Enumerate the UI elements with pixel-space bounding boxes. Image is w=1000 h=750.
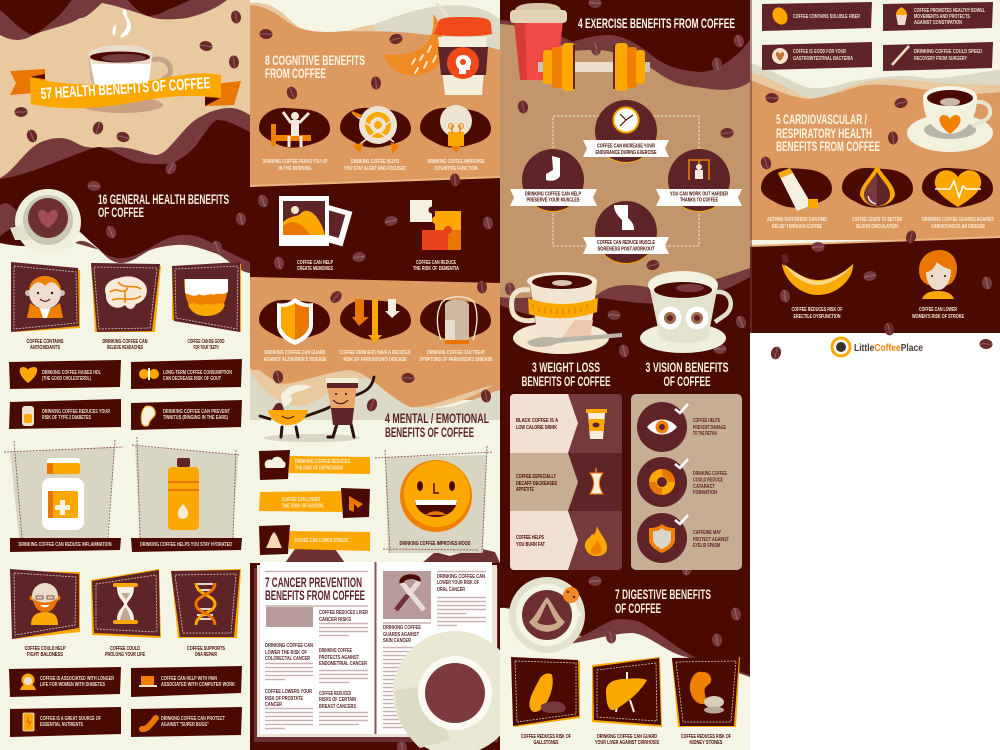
icon: down arrows [352, 299, 400, 343]
heading: 7 digestive benefits: OF COFFEE [615, 600, 661, 616]
panel: weight loss list: COFFEE HELPS [516, 535, 544, 541]
strip: HDL: (THE GOOD CHOLESTEROL) [42, 376, 91, 382]
strip: soluble fiber: COFFEE CONTAINS SOLUBLE FIBER [793, 14, 861, 20]
item: Alzheimer's [259, 298, 330, 363]
panel: prolong life [91, 569, 161, 658]
item: depression [259, 450, 370, 480]
panel: improves mood smiley: DRINKING COFFEE IMPROVES MOOD [400, 541, 470, 547]
icon: top-down cup on newspaper [393, 631, 517, 750]
panel: column 3 exercise background [500, 0, 750, 750]
strip: gut bacteria [762, 42, 872, 70]
icon: cup with eyes [640, 271, 731, 353]
strip: gout: LONG-TERM COFFEE CONSUMPTION [163, 370, 232, 376]
panel: exercise benefits diagram [510, 100, 742, 264]
icon: takeaway cup [586, 409, 607, 439]
item: stroke: COFFEE CAN LOWER [919, 307, 958, 313]
panel: kidney stones [672, 657, 740, 746]
item: stroke: WOMEN'S RISK OF STROKE [912, 314, 964, 320]
item: erectile dysfunction: ERECTILE DYSFUNCTION [794, 314, 840, 320]
panel: newspaper cancer prevention: PROTECTS AGAINST [319, 655, 359, 661]
item: reduced Parkinson's risk [340, 299, 411, 363]
strip: longer life for women: LIFE FOR WOMEN WITH DIABETES [40, 682, 105, 688]
item: circulation: COFFEE LEADS TO BETTER [852, 217, 903, 223]
heading: 8 cognitive benefits [265, 52, 365, 81]
icon: kidneys [139, 368, 159, 380]
item: depression: THE RISK OF DEPRESSION [295, 466, 343, 472]
panel: hydration [131, 437, 242, 552]
panel: column 2 cognitive background [250, 0, 500, 750]
icon: shield [277, 298, 313, 345]
item: stroke [912, 250, 964, 320]
icon: blood drop [860, 165, 895, 206]
icon: red takeaway cup [510, 3, 567, 80]
strip: nutrients: ESSENTIAL NUTRIENTS [40, 722, 83, 728]
strip: HDL: DRINKING COFFEE RAISES HDL [42, 370, 101, 376]
panel: newspaper cancer prevention: CANCER [265, 702, 283, 708]
heading: 16 general health benefits: OF COFFEE [98, 204, 144, 220]
panel: newspaper cancer prevention: ENDOMETRIAL CANCER [319, 661, 368, 667]
icon: brain [105, 276, 147, 309]
item: create memories: CREATE MEMORIES [297, 266, 333, 272]
heading: 3 vision benefits [646, 359, 728, 389]
strip: bowel movements [883, 2, 993, 31]
title ribbon [10, 69, 241, 108]
strip: surgery recovery: RECOVERY FROM SURGERY [914, 56, 967, 62]
strip: surgery recovery [883, 42, 993, 71]
item: cognitive function: DRINKING COFFEE IMPROVES [428, 159, 485, 165]
panel: prolong life: COFFEE COULD [110, 646, 140, 652]
heading: 7 digestive benefits: 7 DIGESTIVE BENEFITS [615, 586, 711, 602]
strip: gout: CAN DECREASE RISK OF GOUT [163, 376, 221, 382]
logo: LittleCoffeePlace [832, 338, 923, 356]
heading: 4 mental / emotional: 4 MENTAL / EMOTIONAL [385, 410, 489, 426]
icon: heart [20, 367, 37, 383]
item: depression: DRINKING COFFEE REDUCES [295, 459, 350, 465]
coffee beans: column 1 [14, 10, 247, 255]
item: treat Parkinson's symptoms: SYMPTOMS OF PARKINSON'S DISEASE [420, 357, 493, 363]
panel: newspaper cancer prevention: ORAL CANCER [437, 587, 466, 593]
strip: tinnitus: TINNITUS (RINGING IN THE EARS) [163, 415, 228, 421]
heading: 3 weight loss benefits: BENEFITS OF COFFEE [522, 373, 610, 389]
panel: liver [592, 657, 662, 746]
panel: newspaper cancer prevention: SKIN CANCER [383, 638, 412, 644]
strip: computer work: COFFEE CAN HELP WITH PAIN [161, 676, 217, 682]
icon: cup with measuring tape [512, 272, 622, 354]
panel: headaches [91, 263, 161, 351]
icon: liver [606, 672, 647, 712]
item: Alzheimer's: DRINKING COFFEE CAN GUARD [264, 350, 326, 356]
item: muscle soreness: SORENESS POST-WORKOUT [598, 246, 655, 252]
panel: newspaper cancer prevention: CANCER RISKS [319, 617, 351, 623]
item: dementia: COFFEE CAN REDUCE [416, 260, 456, 266]
icon: clock [614, 108, 638, 132]
panel: newspaper cancer prevention: RISK OF PROSTATE [265, 696, 303, 702]
icon: woman [20, 674, 36, 690]
item: muscle soreness [583, 201, 669, 264]
icon: dancing coffee cups [260, 377, 374, 442]
heading: 5 cardiovascular: RESPIRATORY HEALTH [776, 125, 872, 141]
item: retina: TO THE RETINA [693, 431, 717, 437]
heading: 8 cognitive benefits: 8 COGNITIVE BENEFITS [265, 52, 365, 68]
panel: newspaper cancer prevention: DRINKING COFFEE CAN [265, 643, 313, 649]
heading: 16 general health benefits: 16 GENERAL HEALTH BENEFITS [98, 191, 229, 207]
panel: baldness [10, 569, 80, 658]
item: cataract: CATARACT [693, 484, 715, 490]
panel: teeth: FOR YOUR TEETH [194, 345, 218, 351]
icon: ear [141, 406, 155, 426]
heading: 5 cardiovascular: BENEFITS FROM COFFEE [776, 138, 880, 154]
item: perks you up: IN THE MORNING [278, 166, 312, 172]
item: dementia [410, 200, 461, 272]
item: muscle soreness: COFFEE CAN REDUCE MUSCLE [597, 240, 655, 246]
heading: 8 cognitive benefits: FROM COFFEE [265, 65, 326, 81]
icon: glucose meter [22, 406, 34, 426]
item: cataract [637, 457, 727, 507]
panel: inflammation [4, 440, 123, 552]
item: perks you up: DRINKING COFFEE PERKS YOU UP [262, 159, 328, 165]
panel: headaches: DRINKING COFFEE CAN [102, 339, 148, 345]
panel: prolong life: PROLONG YOUR LIFE [105, 652, 145, 658]
panel: teeth: COFFEE CAN BE GOOD [188, 339, 224, 345]
item: retina [637, 402, 726, 452]
panel: newspaper cancer prevention: DRINKING COFFEE [383, 625, 421, 631]
panel: baldness: COFFEE COULD HELP [24, 646, 66, 652]
panel: weight loss list: APPETITE [516, 487, 534, 493]
icon: bacteria [142, 718, 156, 729]
panel: newspaper cancer prevention: DRINKING COFFEE CAN [437, 574, 485, 580]
panel: liver: YOUR LIVER AGAINST CIRRHOSIS [595, 740, 659, 746]
item: work out harder: YOU CAN WORK OUT HARDER [670, 192, 729, 198]
panel: antioxidants: ANTIOXIDANTS [30, 345, 60, 351]
icon: light bulb [440, 105, 472, 153]
panel: liver: DRINKING COFFEE CAN GUARD [597, 734, 657, 740]
strip: nutrients: COFFEE IS A GREAT SOURCE OF [40, 716, 101, 722]
strip: gout [131, 359, 242, 389]
icon: smiley face [400, 460, 472, 532]
panel: gallstones: COFFEE REDUCES RISK OF [521, 734, 571, 740]
strip: gut bacteria: GASTROINTESTINAL BACTERIA [793, 56, 854, 62]
panel: newspaper cancer prevention: BREAST CANCERS [319, 704, 356, 710]
icon: puzzle [410, 200, 461, 250]
item: suicide risk: THE RISK OF SUICIDE [282, 504, 324, 510]
heading: 5 cardiovascular [776, 111, 880, 154]
panel: newspaper cancer prevention: LOWER THE RISK OF [265, 650, 307, 656]
strip: longer life for women [9, 667, 121, 697]
item: stress: COFFEE CAN LOWER STRESS [294, 538, 348, 544]
item: reduced Parkinson's risk: COFFEE DRINKERS HAVE A REDUCED [340, 350, 410, 356]
item: cognitive function [420, 105, 491, 172]
panel: newspaper cancer prevention: COFFEE LOWERS YOUR [265, 689, 313, 695]
strip: bowel movements: AGAINST CONSTIPATION [914, 20, 962, 26]
item: erectile dysfunction: COFFEE REDUCES RISK OF [792, 307, 843, 313]
item: eyelid spasm [637, 513, 729, 563]
panel: column 4 background [750, 0, 1000, 333]
panel: headaches: RELIEVE HEADACHES [107, 345, 143, 351]
strip: bowel movements: MOVEMENTS AND PROTECTS [914, 14, 970, 20]
coffee beans: column 2 [256, 28, 494, 750]
panel: kidney stones: KIDNEY STONES [690, 740, 723, 746]
panel: antioxidants [11, 262, 80, 351]
panel: inflammation: DRINKING COFFEE CAN REDUCE INFLAMMATION [18, 542, 112, 548]
icon: bald man [30, 583, 60, 625]
icon: top-down cup with heart [10, 189, 81, 255]
item: cataract: FORMATION [693, 490, 717, 496]
strip: gut bacteria: COFFEE IS GOOD FOR YOUR [793, 49, 847, 55]
item: cataract: COULD REDUCE [693, 478, 723, 484]
icon: flexed arm [546, 156, 560, 181]
icon: target and arrows [352, 106, 398, 152]
icon: vampire [25, 276, 65, 318]
strip: tinnitus [131, 400, 242, 430]
heading: 7 digestive benefits [615, 586, 711, 616]
item: asthma: RELIEF THROUGH COFFEE [772, 224, 822, 230]
icon: gallbladder and stones [529, 673, 566, 713]
item: circulation: BLOOD CIRCULATION [856, 224, 898, 230]
panel: newspaper cancer prevention: BENEFITS FROM COFFEE [265, 587, 365, 603]
panel: kidney stones: COFFEE REDUCES RISK OF [681, 734, 731, 740]
icon: flame [585, 526, 607, 556]
icon: gun [349, 496, 363, 512]
strip: nutrients [10, 707, 121, 737]
icon: latte badge [772, 48, 788, 64]
icon: pill bottle [42, 458, 84, 530]
strip: tinnitus: DRINKING COFFEE CAN PREVENT [163, 409, 230, 415]
strip: super bugs [131, 707, 242, 737]
item: cardiovascular disease [922, 168, 994, 230]
icon: DNA helix [196, 583, 215, 625]
icon: ice cream cup [896, 7, 907, 25]
panel: newspaper cancer prevention: COFFEE REDUCES [319, 691, 351, 697]
icon: hourglass [113, 583, 138, 624]
item: endurance [583, 100, 669, 163]
item: circulation [842, 165, 913, 230]
item: alert and focused: DRINKING COFFEE HELPS [351, 159, 399, 165]
heading: 16 general health benefits [98, 191, 229, 220]
icon: takeaway cup with brain badge [434, 3, 492, 95]
panel: newspaper cancer prevention: COFFEE REDUCES LIVER [319, 610, 369, 616]
item: reduced Parkinson's risk: RISK OF PARKINSON'S DISEASE [344, 357, 407, 363]
item: erectile dysfunction [781, 253, 853, 320]
panel: newspaper cancer prevention: LOWER YOUR RISK OF [437, 580, 479, 586]
icon: kidney and stones [690, 672, 724, 714]
item: create memories: COFFEE CAN HELP [297, 260, 333, 266]
item: suicide risk: COFFEE CAN LOWER [282, 497, 321, 503]
panel: newspaper cancer prevention [254, 562, 498, 742]
item: retina: COFFEE HELPS [693, 418, 720, 424]
item: preserve muscles [510, 149, 597, 212]
panel: DNA repair: COFFEE SUPPORTS [187, 646, 225, 652]
item: suicide risk [259, 488, 370, 518]
item: stress [259, 525, 370, 555]
item: perks you up [259, 108, 330, 172]
strip: computer work: ASSOCIATED WITH COMPUTER WORK [161, 682, 236, 688]
heading: 4 mental / emotional: BENEFITS OF COFFEE [385, 424, 474, 440]
icon: smiling teeth [184, 279, 228, 316]
icon: banana [781, 253, 853, 295]
panel: weight loss list: YOU BURN FAT [516, 542, 545, 548]
strip: computer work [131, 666, 242, 697]
item: preserve muscles: DRINKING COFFEE CAN HELP [525, 192, 581, 198]
panel: weight loss list: BLACK COFFEE IS A [516, 418, 559, 424]
coffee beans: column 3 [504, 0, 748, 647]
strip: longer life for women: COFFEE IS ASSOCIATED WITH LONGER [40, 676, 115, 682]
article rules [265, 572, 486, 728]
item: retina: PREVENT DAMAGE [693, 425, 726, 431]
item: preserve muscles: PRESERVE YOUR MUSCLES [526, 198, 580, 204]
panel: weight loss list: LOW CALORIE DRINK [516, 425, 558, 431]
item: eyelid spasm: PROTECT AGAINST [693, 537, 729, 543]
icon: battery [23, 713, 34, 731]
item: asthma: ASTHMA SUFFERERS CAN FIND [767, 217, 827, 223]
icon: person waking up [271, 112, 311, 147]
heading: 5 cardiovascular: 5 CARDIOVASCULAR / [776, 111, 867, 127]
icon: pull-up [689, 160, 709, 180]
title ribbon: 57 HEALTH BENEFITS OF COFFEE [40, 75, 211, 103]
item: Alzheimer's: AGAINST ALZHEIMER'S DISEASE [264, 357, 327, 363]
panel: gallstones [511, 657, 580, 746]
panel: antioxidants: COFFEE CONTAINS [26, 339, 64, 345]
panel: baldness: FIGHT BALDNESS [27, 652, 63, 658]
heading: 3 weight loss benefits [522, 359, 610, 389]
logo: LittleCoffeePlace: LittleCoffeePlace [854, 342, 923, 354]
item: treat Parkinson's symptoms: DRINKING COFFEE CAN TREAT [427, 350, 485, 356]
panel: DNA repair: DNA REPAIR [195, 652, 217, 658]
heading: 3 vision benefits: 3 VISION BENEFITS [646, 359, 728, 375]
panel: weight loss list: DECAFF DECREASES [516, 481, 557, 487]
item: dementia: THE RISK OF DEMENTIA [413, 266, 460, 272]
panel: improves mood smiley [375, 446, 493, 553]
panel: weight loss list: COFFEE ESPECIALLY [516, 474, 556, 480]
panel: newspaper cancer prevention: DRINKING COFFEE [319, 648, 352, 654]
panel: vision list [631, 394, 742, 570]
icon: inhaler [778, 168, 818, 211]
heading: 3 vision benefits: OF COFFEE [664, 373, 710, 389]
strip: diabetes: RISK OF TYPE 2 DIABETES [42, 415, 91, 421]
strip: super bugs: AGAINST "SUPER BUGS" [161, 722, 209, 728]
coffee beans: column 4 [759, 92, 993, 361]
icon: croissant [383, 14, 443, 76]
panel: newspaper cancer prevention: RISKS OF CERTAIN [319, 697, 356, 703]
item: cognitive function: COGNITIVE FUNCTION [434, 166, 478, 172]
icon: water bottle [168, 458, 199, 530]
icon: latte art cup with cookie [509, 577, 585, 653]
item: endurance: COFFEE CAN INCREASE YOUR [597, 144, 656, 150]
item: endurance: ENDURANCE DURING EXERCISE [596, 150, 657, 156]
item: eyelid spasm: EYELID SPASM [693, 543, 720, 549]
heading: 4 exercise benefits: 4 EXERCISE BENEFITS FROM COFFEE [578, 15, 735, 31]
icon: scalpel [892, 46, 909, 65]
item: alert and focused: YOU STAY ALERT AND FOCUSED [344, 166, 406, 172]
icon: rain cloud [265, 457, 286, 468]
item: asthma [761, 168, 832, 230]
icon: apple core [590, 468, 603, 494]
icon: laptop [139, 676, 157, 687]
strip: soluble fiber [762, 2, 872, 31]
icon: heart rate [935, 170, 981, 207]
heading: 3 weight loss benefits: 3 WEIGHT LOSS [532, 359, 600, 375]
icon: sore leg [614, 205, 634, 230]
panel: gallstones: GALLSTONES [534, 740, 559, 746]
icon: cancer ribbon [396, 577, 424, 610]
icon: steaming coffee cup [81, 9, 171, 113]
panel: DNA repair [171, 569, 241, 658]
strip: diabetes [9, 399, 121, 429]
panel: column 1 header and general benefits background [0, 0, 250, 750]
panel: newspaper cancer prevention: GUARDS AGAINST [383, 632, 419, 638]
strip: HDL [9, 360, 121, 389]
strip: super bugs: DRINKING COFFEE CAN PROTECT [161, 716, 225, 722]
panel: hydration: DRINKING COFFEE HELPS YOU STAY HYDRATED [140, 542, 232, 548]
strip: diabetes: DRINKING COFFEE REDUCES YOUR [42, 409, 111, 415]
panel: newspaper cancer prevention: 7 CANCER PREVENTION [265, 574, 362, 590]
item: alert and focused [340, 106, 411, 172]
item: work out harder [656, 149, 742, 212]
item: treat Parkinson's symptoms [420, 297, 493, 363]
item: cataract: DRINKING COFFEE [693, 471, 727, 477]
icon: woman portrait [919, 250, 957, 299]
icon: heart latte cup on saucer [907, 86, 993, 152]
icon: coffee bean [769, 5, 791, 27]
icon: dumbbell [538, 43, 650, 91]
item: work out harder: THANKS TO COFFEE [680, 198, 718, 204]
panel: newspaper cancer prevention: COLORECTAL CANCER [265, 656, 311, 662]
item: create memories [279, 196, 352, 272]
item: eyelid spasm: CAFFEINE MAY [693, 530, 721, 536]
icon: meditating figure [266, 532, 282, 548]
heading: 4 mental / emotional [385, 410, 489, 440]
icon: hand [437, 297, 477, 344]
icon: polaroids [279, 196, 352, 246]
panel: weight loss list [510, 394, 622, 570]
panel: teeth [172, 262, 241, 351]
